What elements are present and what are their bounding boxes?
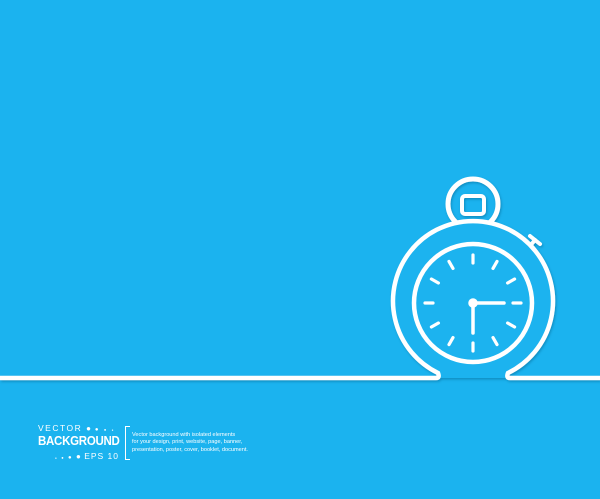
bracket [125, 426, 130, 460]
description text: for your design, print, website, page, banner, [132, 439, 242, 445]
icon: crown ring [448, 179, 498, 229]
description text: presentation, poster, cover, booklet, document. [132, 447, 248, 453]
description text: Vector background with isolated elements [132, 432, 235, 438]
description text [132, 432, 248, 453]
label: BACKGROUND: BACKGROUND [38, 434, 120, 448]
label: VECTOR: VECTOR ● ● ● ● [38, 423, 115, 433]
icon: side button [524, 236, 540, 253]
clock hands [470, 300, 504, 333]
clock face [414, 244, 532, 362]
baseline with stopwatch body [0, 221, 600, 378]
logo block [38, 423, 120, 461]
label: EPS 10: ● ● ● ● EPS 10 [55, 451, 119, 461]
